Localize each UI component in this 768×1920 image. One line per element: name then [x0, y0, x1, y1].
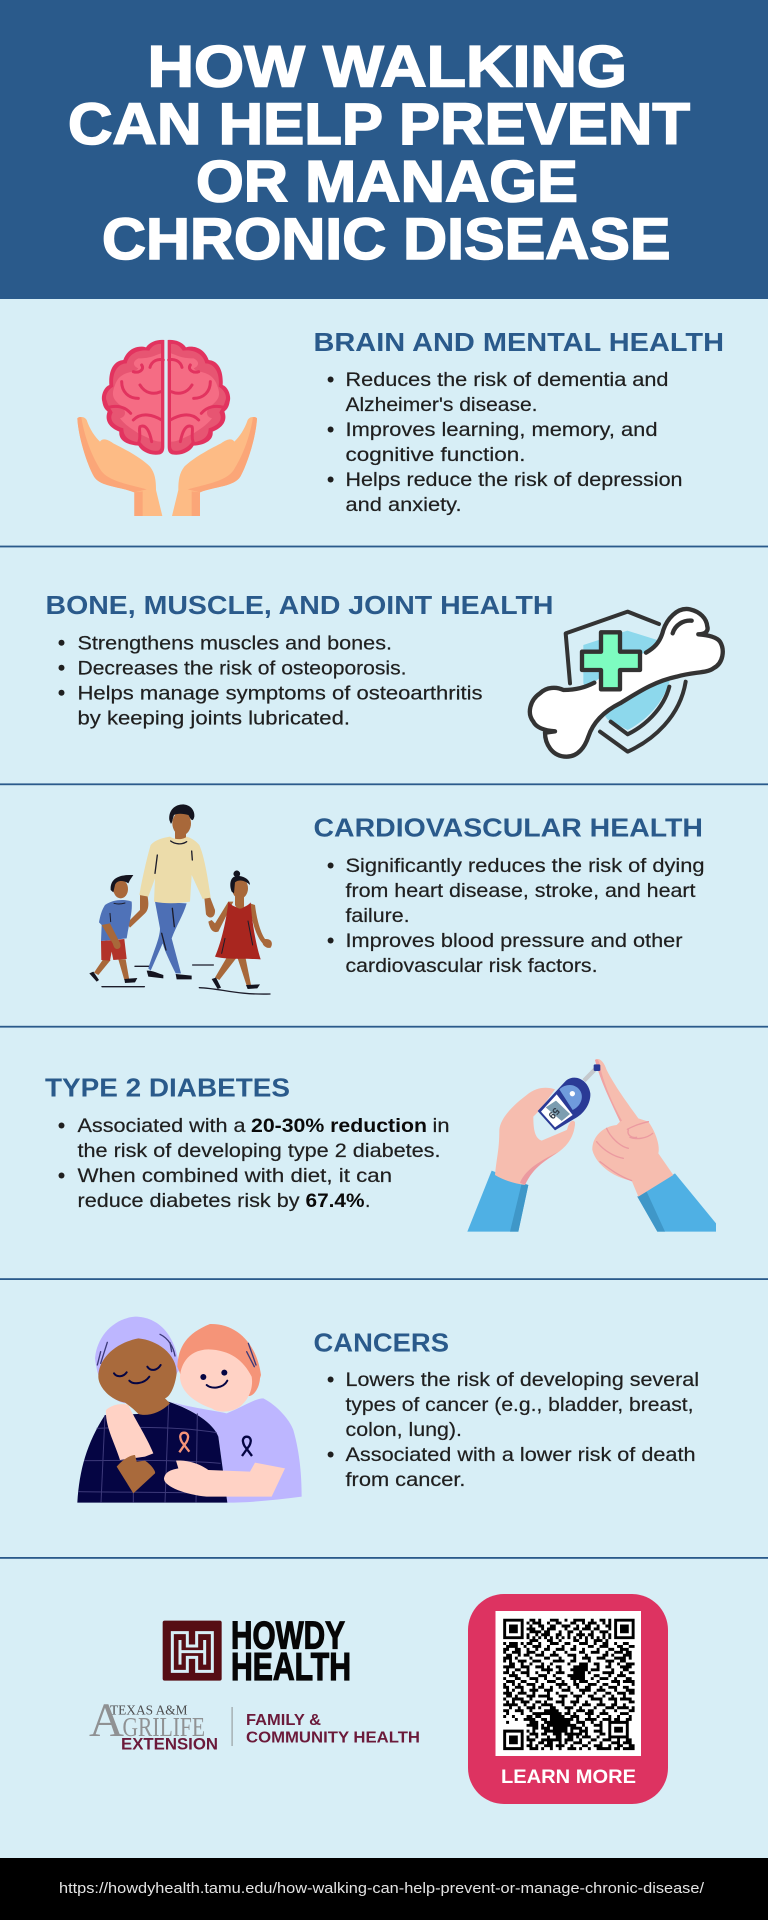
panel: brain and mental health — [0, 299, 768, 546]
logo: Texas A&M AgriLife Extension: A — [89, 1694, 124, 1747]
bullet list — [58, 633, 482, 729]
icon: brain held by hands — [77, 340, 257, 516]
bullet list: and anxiety. — [346, 495, 462, 516]
bullet list: Reduces the risk of dementia and — [346, 370, 668, 391]
bullet list: from heart disease, stroke, and heart — [346, 881, 696, 902]
bullet list: reduce diabetes risk by — [78, 1191, 300, 1212]
title: CAN HELP PREVENT — [68, 92, 690, 157]
logo: Texas A&M AgriLife Extension: EXTENSION — [121, 1736, 218, 1754]
bullet list — [328, 856, 704, 977]
bullet list: the risk of developing type 2 diabetes. — [78, 1141, 441, 1162]
bullet list: failure. — [346, 906, 410, 927]
bullet list: Improves blood pressure and other — [346, 931, 683, 952]
QR label: LEARN MORE — [501, 1766, 636, 1788]
bullet list: Helps reduce the risk of depression — [346, 470, 682, 491]
bullet list: Strengthens muscles and bones. — [78, 633, 392, 654]
bullet list: Lowers the risk of developing several — [346, 1370, 699, 1391]
logo: Texas A&M AgriLife Extension: TEXAS A&M — [110, 1704, 188, 1718]
heading: CARDIOVASCULAR HEALTH — [314, 813, 703, 843]
bullet list: colon, lung). — [346, 1420, 462, 1441]
heading: TYPE 2 DIABETES — [45, 1073, 290, 1103]
logo: Texas A&M AgriLife Extension — [89, 1694, 420, 1754]
heading: CANCERS — [314, 1327, 449, 1357]
bullet list: Helps manage symptoms of osteoarthritis — [78, 683, 482, 704]
title — [68, 35, 690, 272]
heading: BRAIN AND MENTAL HEALTH — [314, 327, 724, 357]
icon: two people hugging with ribbons — [77, 1317, 302, 1503]
bullet list: Improves learning, memory, and — [346, 420, 658, 441]
bullet list: . — [365, 1191, 370, 1212]
QR code — [503, 1619, 635, 1750]
bullet list: in — [432, 1116, 450, 1137]
icon: bone with shield and cross — [530, 609, 723, 757]
panel: bone, muscle, and joint health — [46, 590, 723, 757]
logo: Texas A&M AgriLife Extension: FAMILY & — [246, 1712, 321, 1729]
panel: cancers — [77, 1317, 699, 1503]
panel: logos and QR code — [89, 1594, 668, 1804]
bullet list: Associated with a lower risk of death — [346, 1445, 696, 1466]
panel: type 2 diabetes — [45, 1059, 716, 1232]
bullet list: Decreases the risk of osteoporosis. — [78, 658, 406, 679]
bullet list: 67.4% — [306, 1191, 364, 1212]
icon: Howdy Health H mark — [163, 1621, 222, 1681]
header panel — [0, 0, 768, 299]
bullet list: cognitive function. — [346, 445, 526, 466]
QR code card — [468, 1594, 668, 1804]
bullet list: types of cancer (e.g., bladder, breast, — [346, 1395, 694, 1416]
bullet list: cardiovascular risk factors. — [346, 956, 598, 977]
icon: hands with glucose meter — [467, 1059, 716, 1232]
bullet list: 20-30% reduction — [251, 1116, 427, 1137]
bullet list: Associated with a — [78, 1116, 246, 1137]
icon: family walking hand in hand — [89, 804, 272, 994]
bullet list: Alzheimer's disease. — [346, 395, 538, 416]
icon: hands with glucose meter: 59 — [545, 1105, 561, 1121]
logo: Howdy Health: HEALTH — [231, 1646, 351, 1689]
bullet list: by keeping joints lubricated. — [78, 708, 350, 729]
heading: BONE, MUSCLE, AND JOINT HEALTH — [46, 590, 554, 620]
bullet list — [328, 370, 682, 516]
logo: Texas A&M AgriLife Extension: GRILIFE — [122, 1712, 205, 1742]
bullet list: from cancer. — [346, 1470, 466, 1491]
bullet list — [58, 1116, 450, 1212]
source URL: https://howdyhealth.tamu.edu/how-walking-can-help-prevent-or-manage-chronic-disease/ — [59, 1880, 705, 1897]
bullet list: When combined with diet, it can — [78, 1166, 392, 1187]
title: OR MANAGE — [196, 150, 578, 215]
bullet list — [328, 1370, 699, 1491]
footer bar — [0, 1858, 768, 1920]
panel: cardiovascular health — [89, 804, 704, 994]
title: HOW WALKING — [148, 35, 627, 100]
logo: Howdy Health — [163, 1615, 351, 1689]
logo: Howdy Health: HOWDY — [231, 1615, 345, 1658]
title: CHRONIC DISEASE — [102, 207, 670, 272]
logo: Texas A&M AgriLife Extension: COMMUNITY HEALTH — [246, 1729, 420, 1746]
bullet list: Significantly reduces the risk of dying — [346, 856, 704, 877]
